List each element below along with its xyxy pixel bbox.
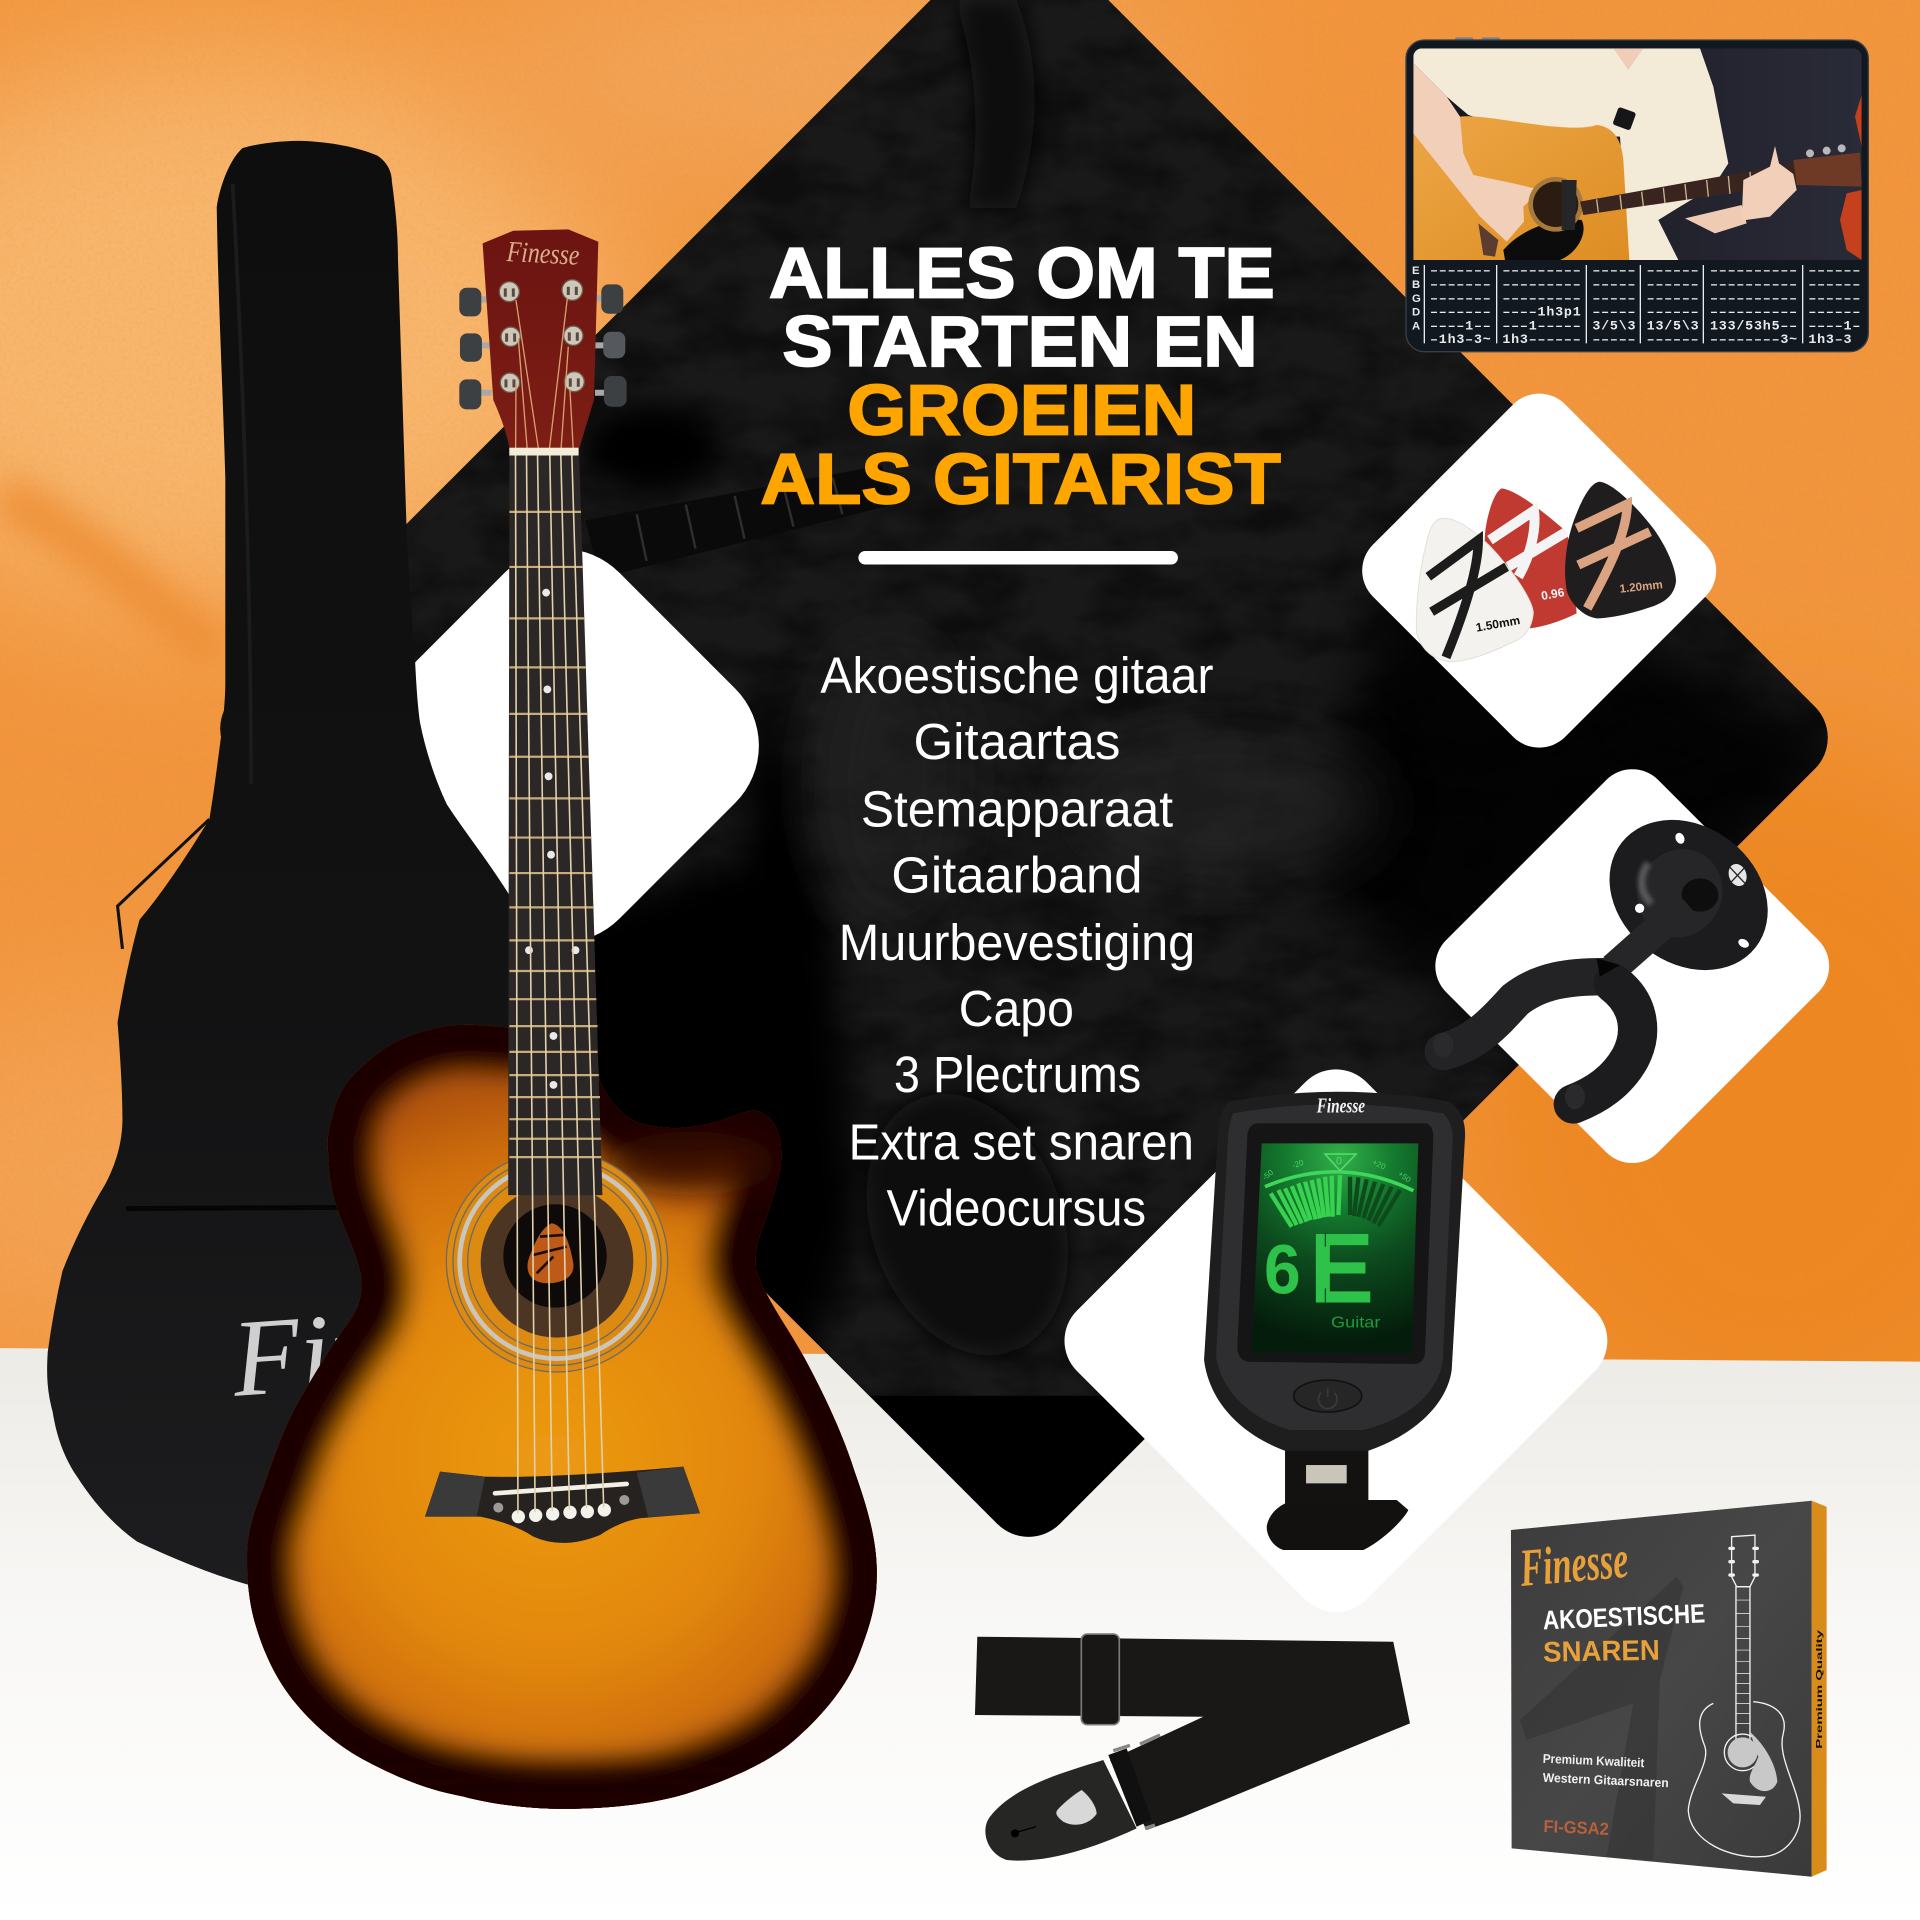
guitar tablature strip: –––––––––– (1710, 278, 1798, 293)
headstock plate (483, 229, 598, 448)
guitar tablature strip: –––––– (1647, 333, 1699, 348)
tuner posts (499, 280, 584, 392)
leather strap end (985, 1760, 1137, 1861)
background: white floor (0, 1348, 1920, 1920)
background: orange wall (0, 0, 1920, 1469)
strings (516, 456, 604, 1513)
guitar tablature strip: D (1412, 307, 1420, 319)
tuner screen: -20 (1291, 1158, 1305, 1170)
wall mount hanger (1433, 789, 1798, 1109)
bridge (425, 1467, 700, 1543)
contents list: Stemapparaat (861, 780, 1173, 838)
box model number: FI-GSA2 (1543, 1816, 1609, 1839)
guitar tablature strip: 133/53h5–– (1710, 319, 1798, 334)
guitar tablature strip: –––––– (1808, 292, 1861, 307)
clip-on tuner: Finesse (1316, 1096, 1365, 1118)
guitar tablature strip: –––––– (1647, 292, 1699, 307)
guitar tablature strip: –––––– (1808, 306, 1861, 321)
contents list: Akoestische gitaar (820, 646, 1213, 704)
fretboard (508, 456, 602, 1195)
guitar tablature strip: –––––––––– (1710, 292, 1798, 307)
box front (1511, 1501, 1812, 1877)
box description: Western Gitaarsnaren (1542, 1771, 1669, 1790)
box guitar line drawing (1688, 1535, 1800, 1857)
guitar tablature strip: ––––––––3~ (1710, 333, 1798, 348)
black central diamond panel (220, 0, 1828, 1537)
bag carrying loop (118, 819, 209, 949)
box spine: Premium Quality (1814, 1630, 1824, 1749)
faint guitarist photo backdrop (122, 0, 1898, 1396)
guitar tablature strip: ––––– (1592, 292, 1636, 307)
guitar body with sunburst (247, 1024, 877, 1809)
box heading: SNAREN (1543, 1635, 1660, 1669)
box heading: AKOESTISCHE (1542, 1598, 1706, 1635)
tuner power button (1294, 1380, 1362, 1412)
box description (1542, 1752, 1669, 1790)
black plectrum: 1.20mm (1619, 578, 1663, 596)
tablet frame (1406, 37, 1868, 352)
guitar tablature strip: ––––––– (1430, 306, 1492, 321)
contents list: Muurbevestiging (839, 913, 1195, 971)
guitar tablature strip: –––––– (1647, 306, 1699, 321)
box heading (1542, 1598, 1706, 1669)
guitar tablature strip: B (1412, 279, 1420, 291)
headstock logo: Finesse (505, 236, 580, 272)
title: GROEIEN (847, 372, 1196, 451)
tuner screen (1252, 1143, 1418, 1353)
tile: wall mount (1420, 754, 1844, 1178)
contents list: Capo (959, 979, 1074, 1037)
guitar tablature strip: 1h3–3 (1808, 333, 1852, 348)
title (760, 235, 1281, 519)
black plectrum (1565, 482, 1676, 618)
sound hole and rosette (446, 1151, 668, 1372)
spare strings box (1511, 1501, 1827, 1877)
white tile behind guitar neck (332, 515, 792, 976)
divider bar under title (858, 551, 1178, 564)
contents list: Videocursus (887, 1179, 1146, 1237)
tuning pegs (459, 284, 627, 409)
contents list: Gitaarband (891, 846, 1142, 904)
tile: plectrums (1347, 378, 1731, 763)
guitar tablature strip: G (1412, 293, 1421, 305)
guitar tablature strip: –––––– (1808, 264, 1861, 279)
tuner screen: +50 (1396, 1169, 1413, 1185)
strap slider buckle (1081, 1634, 1119, 1725)
guitar tablature strip: ––––1– (1808, 319, 1861, 334)
tuner screen: 6 (1264, 1230, 1301, 1308)
guitar strap (975, 1634, 1410, 1861)
guitar tablature strip: –––––––––– (1710, 264, 1798, 279)
video still of guitarist (1413, 48, 1862, 260)
guitar tablature strip: ––––– (1592, 264, 1636, 279)
guitar tablature strip: ––––––––– (1502, 278, 1582, 293)
guitar tablature strip: ––––– (1592, 306, 1636, 321)
tuner screen: E (1309, 1214, 1374, 1325)
gig bag (47, 141, 573, 1592)
tuner screen: Guitar (1331, 1314, 1381, 1331)
guitar tablature strip: ––––––– (1430, 292, 1492, 307)
guitar tablature strip: ––––––––– (1502, 292, 1582, 307)
box logo: Finesse (1517, 1529, 1631, 1598)
tuner screen: -50 (1261, 1168, 1276, 1182)
headstock (459, 229, 627, 456)
contents list: Extra set snaren (849, 1113, 1194, 1171)
guitar tablature strip: –––––– (1647, 264, 1699, 279)
title: ALS GITARIST (760, 440, 1281, 519)
guitar tablature strip: ––––– (1592, 278, 1636, 293)
guitar tablature strip: 3/5\3 (1592, 319, 1636, 334)
nut (509, 448, 579, 456)
contents list: 3 Plectrums (894, 1045, 1141, 1103)
box description: Premium Kwaliteit (1542, 1752, 1645, 1770)
guitar tablature strip: ––––––– (1430, 264, 1492, 279)
guitar tablature strip: A (1412, 320, 1420, 332)
guitar tablature strip: –––1––––– (1502, 319, 1582, 334)
guitar tablature strip: ––––– (1592, 333, 1636, 348)
guitar tablature strip: ––––1–– (1430, 319, 1492, 334)
tuner clip base (1267, 1447, 1408, 1550)
clip-on tuner (1204, 1092, 1465, 1550)
guitar tablature strip: –1h3–3~ (1430, 333, 1492, 348)
guitar tablature strip: 1h3–––––– (1502, 333, 1582, 348)
tile: tuner (1047, 1052, 1625, 1630)
guitar tablature strip: –––––– (1647, 278, 1699, 293)
white plectrum (1416, 518, 1533, 662)
plectrum artwork (1416, 482, 1676, 662)
bag logo: Finesse (227, 1275, 573, 1420)
title: STARTEN EN (782, 303, 1258, 382)
title: ALLES OM TE (769, 235, 1275, 314)
guitar tablature strip: ––––––––– (1502, 264, 1582, 279)
red plectrum: 0.96 (1540, 585, 1566, 603)
guitar tablature strip: ––––1h3p1 (1502, 306, 1582, 321)
box spine (1812, 1501, 1827, 1877)
guitar tablature strip: E (1412, 265, 1420, 277)
tuner screen: 0 (1336, 1156, 1342, 1168)
guitar tablature strip: –––––– (1808, 278, 1861, 293)
acoustic guitar (247, 229, 877, 1809)
guitar tablature strip (1412, 264, 1861, 348)
guitar tablature strip: –––––––––– (1710, 306, 1798, 321)
guitar tablature strip: ––––––– (1430, 278, 1492, 293)
red plectrum (1485, 488, 1577, 628)
video course tablet (1406, 37, 1868, 352)
contents list: Gitaartas (913, 712, 1120, 770)
guitar tablature strip: 13/5\3 (1647, 319, 1699, 334)
tuner screen: +20 (1371, 1158, 1387, 1172)
white plectrum: 1.50mm (1475, 613, 1521, 635)
contents list (820, 646, 1213, 1237)
tuner body (1204, 1092, 1465, 1451)
